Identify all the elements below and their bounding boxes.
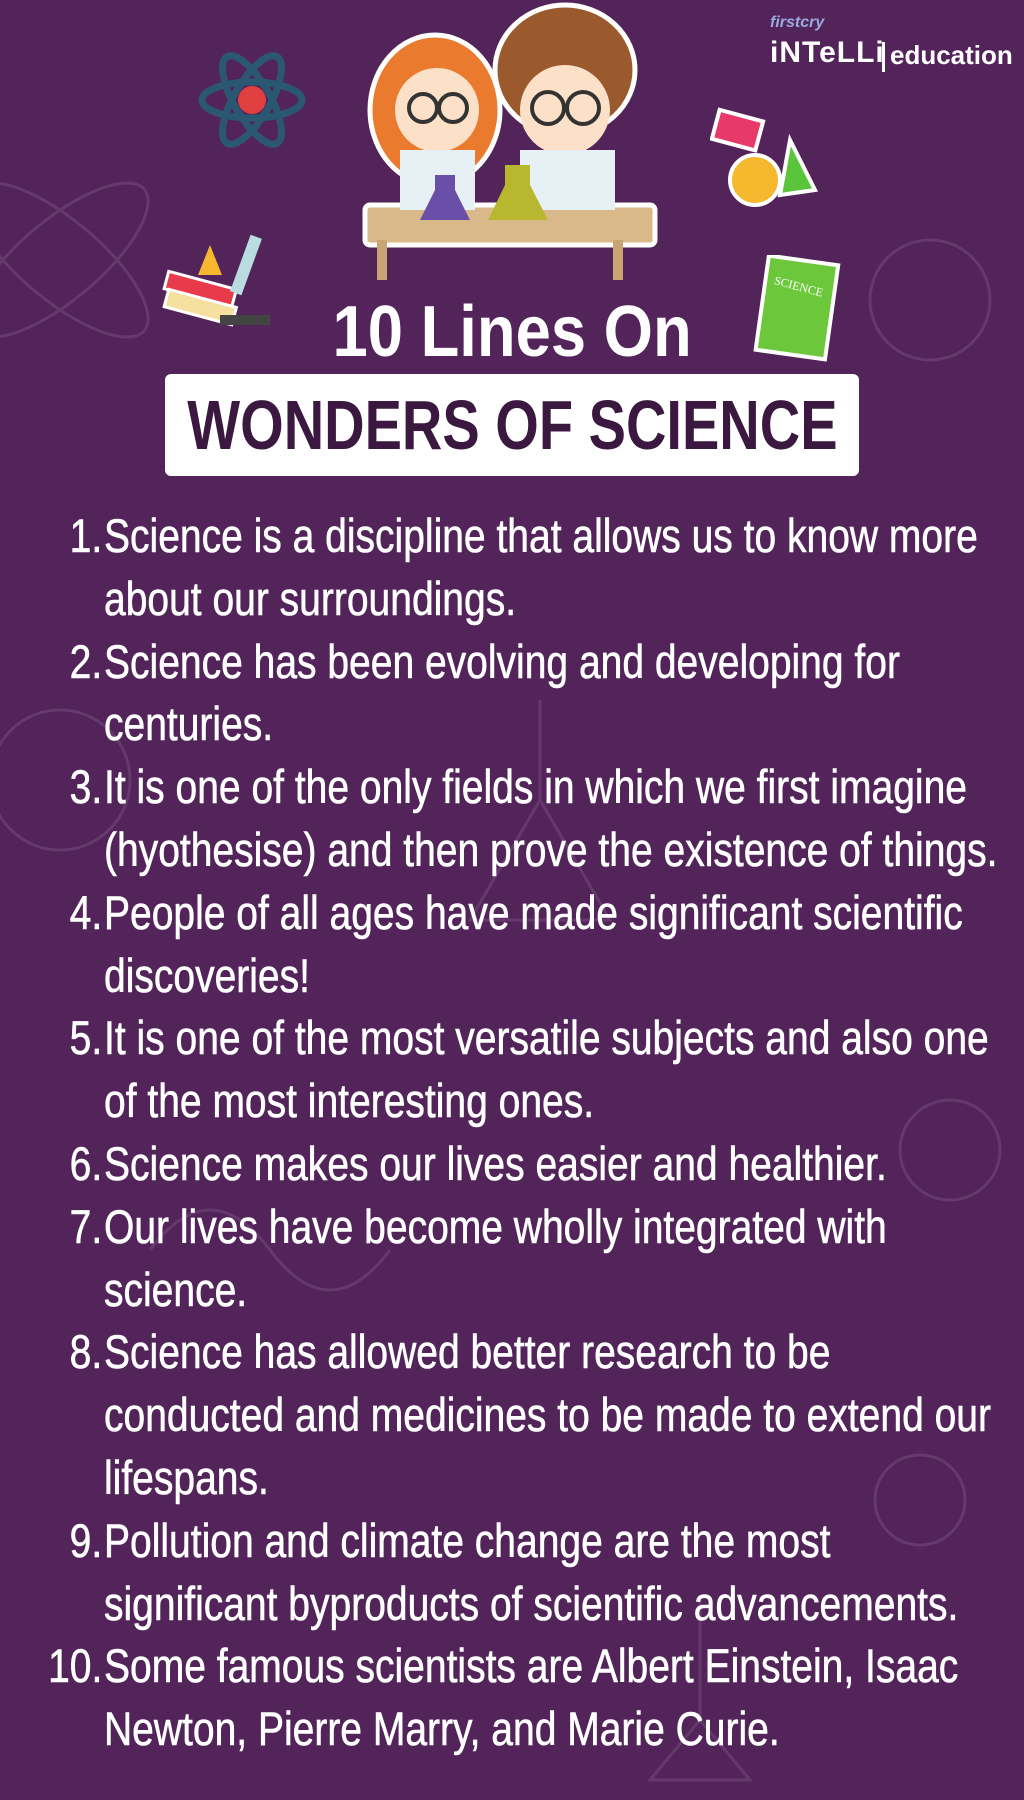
list of 10 lines: Science makes our lives easier and healthier. — [104, 1137, 887, 1190]
list of 10 lines: 10. — [48, 1639, 102, 1692]
logo: iNTeLLi — [770, 36, 885, 69]
list of 10 lines: discoveries! — [104, 949, 310, 1002]
list of 10 lines: conducted and medicines to be made to extend our — [104, 1388, 991, 1441]
list of 10 lines: 8. — [69, 1325, 102, 1378]
list of 10 lines: Science has allowed better research to be — [104, 1325, 830, 1378]
list of 10 lines: 2. — [69, 635, 102, 688]
list of 10 lines: science. — [104, 1263, 247, 1316]
list of 10 lines: 4. — [69, 886, 102, 939]
list of 10 lines: People of all ages have made significant scientific — [104, 886, 963, 939]
list of 10 lines: 7. — [69, 1200, 102, 1253]
list of 10 lines: It is one of the only fields in which we first imagine — [104, 760, 967, 813]
list of 10 lines: about our surroundings. — [104, 572, 516, 625]
list of 10 lines: 5. — [69, 1011, 102, 1064]
list of 10 lines: 3. — [69, 760, 102, 813]
list of 10 lines: It is one of the most versatile subjects and also one — [104, 1011, 989, 1064]
list of 10 lines: Pollution and climate change are the most — [104, 1514, 830, 1567]
list of 10 lines: Newton, Pierre Marry, and Marie Curie. — [104, 1702, 780, 1755]
list of 10 lines: 6. — [69, 1137, 102, 1190]
icon: atom — [198, 52, 306, 148]
list of 10 lines: significant byproducts of scientific advancements. — [104, 1577, 958, 1630]
list of 10 lines: Science is a discipline that allows us to know more — [104, 509, 978, 562]
list of 10 lines — [48, 509, 997, 1756]
logo: education — [890, 40, 1013, 70]
list of 10 lines: Science has been evolving and developing for — [104, 635, 900, 688]
logo: firstcry — [770, 14, 824, 31]
list of 10 lines: Some famous scientists are Albert Einstein, Isaac — [104, 1639, 958, 1692]
list of 10 lines: 1. — [69, 509, 102, 562]
list of 10 lines: 9. — [69, 1514, 102, 1567]
list of 10 lines: centuries. — [104, 697, 273, 750]
icon: science book: SCIENCE — [773, 273, 825, 300]
icon: flasks pouring — [710, 107, 818, 207]
list of 10 lines: of the most interesting ones. — [104, 1074, 594, 1127]
illustration: kids in lab — [362, 2, 658, 280]
icon: microscope and books — [162, 234, 270, 327]
heading box: Wonders of Science: WONDERS OF SCIENCE — [187, 386, 837, 464]
list of 10 lines: (hyothesise) and then prove the existence of things. — [104, 823, 997, 876]
list of 10 lines: lifespans. — [104, 1451, 269, 1504]
logo — [770, 14, 1013, 72]
list of 10 lines: Our lives have become wholly integrated with — [104, 1200, 887, 1253]
icon: science book — [753, 255, 840, 362]
title: 10 Lines On: 10 Lines On — [332, 292, 692, 372]
